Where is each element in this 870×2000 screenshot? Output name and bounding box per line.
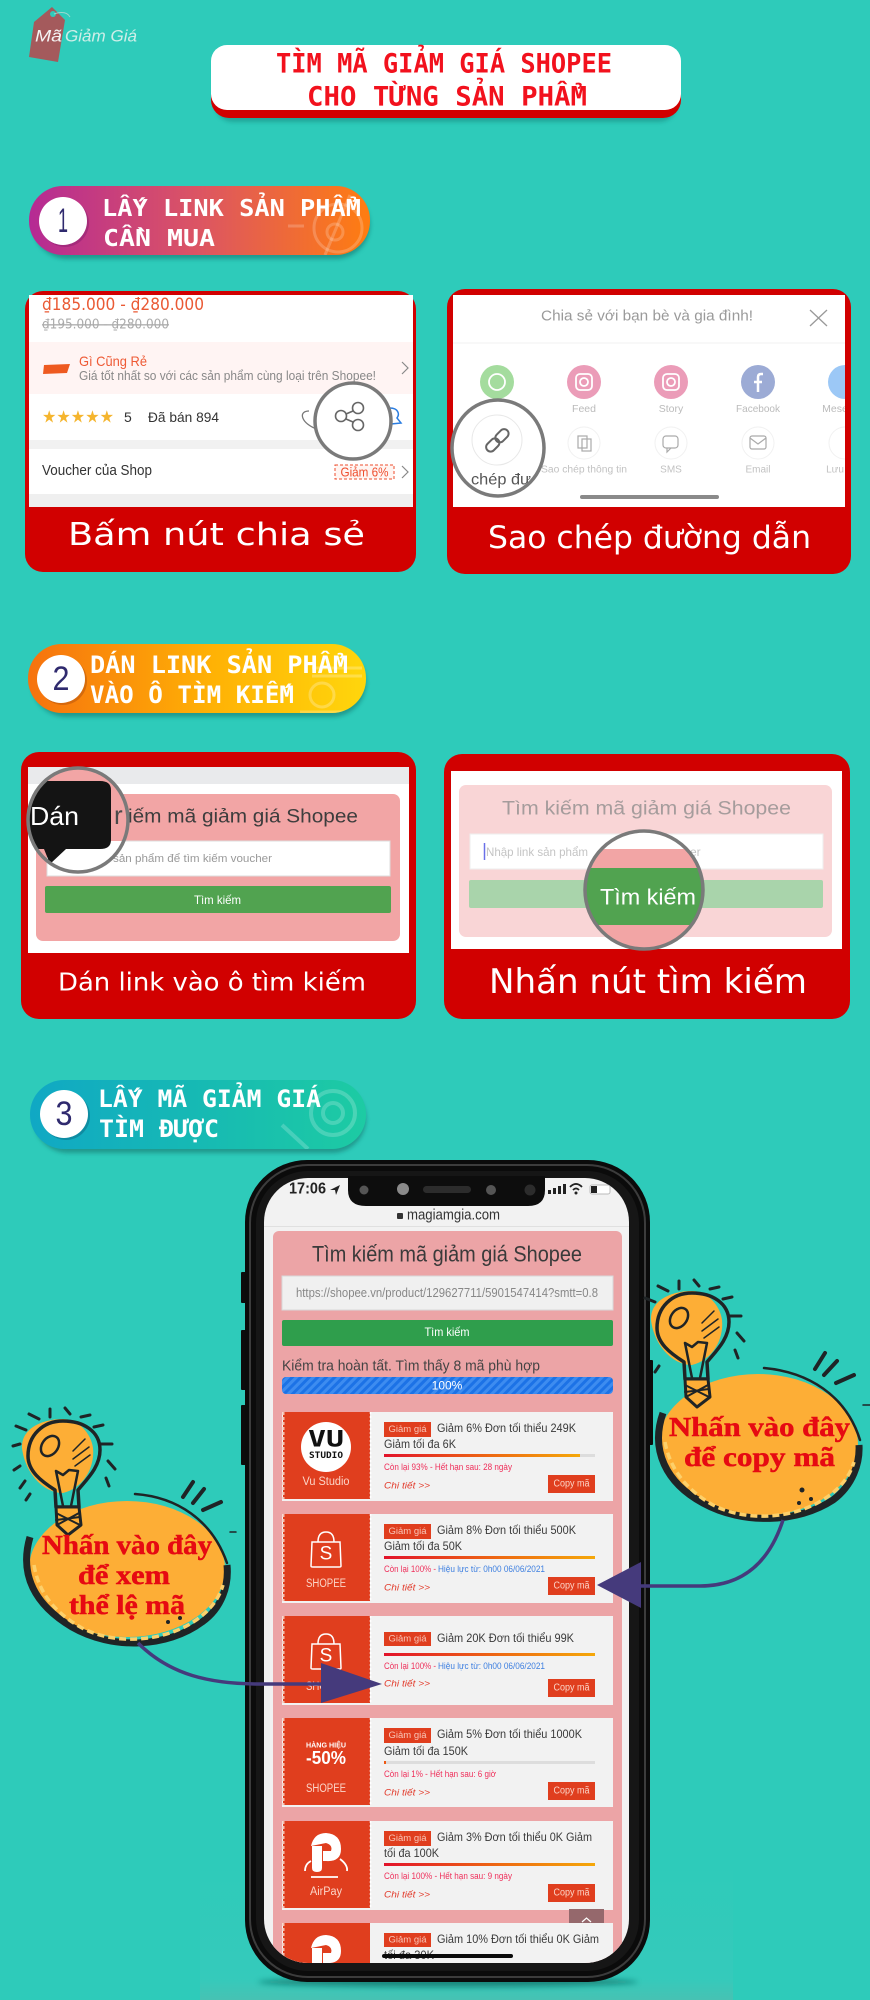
share sheet screenshot: SMS	[660, 464, 682, 476]
address bar: magiamgia.com	[407, 1206, 500, 1224]
voucher card: Shopee 5%: -50%	[306, 1748, 346, 1768]
step 3 badge: TÌM ĐƯỢC	[99, 1114, 219, 1143]
voucher card: Shopee 20K: Giảm 20K Đơn tối thiểu 99K	[437, 1631, 574, 1645]
panel: copy link	[447, 289, 862, 574]
voucher card: AirPay 3%: Copy mã	[554, 1888, 590, 1898]
voucher card: Shopee 20K	[282, 1616, 613, 1705]
step 2 badge: 2	[52, 660, 70, 698]
arrow: to Chi tiết link	[138, 1643, 382, 1703]
voucher card: Shopee 8%: Hiệu lực từ: 0h00 06/06/2021	[438, 1564, 545, 1574]
notch	[348, 1176, 545, 1206]
share sheet screenshot: Story	[659, 403, 684, 415]
voucher card: Vu Studio: Giảm tối đa 6K	[384, 1437, 456, 1451]
faded search form screenshot: er	[690, 845, 701, 859]
voucher card: Shopee 5%: HÀNG HIỆU	[306, 1740, 346, 1750]
voucher card: Shopee 5%: Giảm tối đa 150K	[384, 1744, 468, 1758]
voucher card: Shopee 5%: Chi tiết >>	[384, 1788, 430, 1798]
title banner: CHO TỪNG SẢN PHẨM	[307, 78, 587, 112]
voucher card: Shopee 5%: SHOPEE	[306, 1783, 346, 1795]
phone screen	[264, 1178, 629, 1991]
search form screenshot: Tìm kiếm	[194, 893, 241, 907]
search panel	[273, 1231, 622, 1991]
voucher card: Shopee 20K: Còn lại 100% -	[384, 1661, 436, 1671]
voucher card: Shopee 20K: Hiệu lực từ: 0h00 06/06/2021	[438, 1661, 545, 1671]
voucher card: Shopee 5%: Giảm giá	[388, 1730, 427, 1741]
voucher card: Shopee 8%	[282, 1514, 613, 1603]
caption: Dán link vào ô tìm kiếm	[58, 968, 366, 996]
product screenshot: Voucher của Shop	[42, 463, 152, 479]
address bar	[264, 1206, 629, 1227]
home indicator	[382, 1954, 513, 1958]
callout text: Nhấn vào đây	[669, 1412, 851, 1442]
voucher card: Vu Studio: Vu Studio	[302, 1476, 350, 1488]
voucher card: Shopee 8%: Giảm tối đa 50K	[384, 1539, 462, 1553]
voucher card: Shopee 8%: SHOPEE	[306, 1578, 346, 1590]
voucher card: AirPay 3%	[282, 1821, 613, 1910]
phone mockup	[241, 1160, 653, 1991]
voucher card: AirPay 10%: Giảm 10% Đơn tối thiểu 0K Giảm	[437, 1932, 599, 1946]
share sheet screenshot: Lưu	[826, 464, 844, 476]
voucher card: Shopee 8%: Copy mã	[554, 1580, 590, 1592]
product screenshot: Đã bán 894	[148, 409, 219, 425]
callout text	[669, 1412, 851, 1472]
product screenshot: ★★★★★	[42, 408, 114, 426]
voucher card: Vu Studio: Copy mã	[554, 1478, 590, 1490]
step 3 badge: LẤY MÃ GIẢM GIÁ	[98, 1082, 322, 1113]
product screenshot: ₫195.000 - ₫280.000	[42, 318, 169, 332]
coin shape	[658, 1353, 870, 1518]
voucher card: AirPay 3%: Chi tiết >>	[384, 1890, 430, 1900]
title banner: TÌM MÃ GIẢM GIÁ SHOPEE	[276, 45, 612, 80]
callout text: Nhấn vào đây	[42, 1530, 213, 1560]
voucher card: Shopee 20K: Chi tiết >>	[384, 1678, 430, 1690]
lightbulb icon	[645, 1280, 744, 1407]
search panel: Tìm kiếm	[424, 1325, 470, 1339]
step 2 badge: VÀO Ô TÌM KIẾM	[90, 679, 294, 709]
voucher card: Shopee 20K: Copy mã	[554, 1682, 590, 1694]
callout text: thể lệ mã	[69, 1590, 186, 1620]
voucher card: Vu Studio: STUDIO	[309, 1451, 344, 1461]
voucher card: Shopee 8%: Chi tiết >>	[384, 1582, 430, 1594]
voucher card: AirPay 3%: tối đa 100K	[384, 1846, 439, 1860]
voucher card: Shopee 8%: Giảm giá	[388, 1526, 427, 1537]
voucher card: AirPay 10%: Giảm giá	[388, 1934, 427, 1946]
product screenshot: ₫185.000 - ₫280.000	[42, 295, 204, 315]
voucher card: AirPay 3%: Giảm 3% Đơn tối thiểu 0K Giảm	[437, 1830, 592, 1844]
title banner	[211, 45, 681, 122]
voucher card: Shopee 8%: S	[320, 1544, 332, 1564]
arrow: to Copy mã button	[597, 1520, 783, 1608]
faded search form screenshot: Tìm kiếm mã giảm giá Shopee	[502, 798, 791, 820]
magnifier: copy link icon: chép đư	[471, 472, 531, 488]
coin shape	[27, 1482, 236, 1643]
step 3 badge: 3	[56, 1095, 72, 1133]
share sheet screenshot: Facebook	[736, 403, 781, 415]
voucher card: AirPay 10%	[282, 1923, 613, 1963]
voucher card: Vu Studio: Chi tiết >>	[384, 1480, 430, 1492]
magnifier: share icon	[315, 383, 391, 459]
voucher card: AirPay 3%: Giảm giá	[388, 1833, 427, 1844]
back to top button	[569, 1909, 604, 1923]
caption: Nhấn nút tìm kiếm	[489, 962, 807, 1002]
voucher card: Vu Studio: Giảm giá	[388, 1424, 427, 1435]
voucher card: Shopee 20K: S	[320, 1646, 332, 1666]
voucher card: Vu Studio: Còn lại 93% - Hết hạn sau: 28 ngày	[384, 1462, 512, 1472]
share sheet screenshot: Chia sẻ với bạn bè và gia đình!	[541, 308, 753, 324]
voucher card: AirPay 3%: AirPay	[310, 1886, 342, 1898]
logo: Mã Giảm Giá: Mã	[35, 26, 63, 46]
faded search form screenshot	[459, 785, 832, 937]
share sheet screenshot: Feed	[572, 403, 596, 415]
step 3 badge	[30, 1080, 366, 1153]
logo: Mã Giảm Giá: Giảm Giá	[65, 26, 137, 46]
magnifier: paste tooltip	[26, 766, 130, 874]
callout: copy voucher	[645, 1280, 870, 1518]
search form screenshot: sản phẩm để tìm kiếm voucher	[113, 853, 272, 865]
callout text: để copy mã	[684, 1442, 836, 1472]
panel: paste link	[20, 752, 416, 1019]
search form screenshot	[36, 794, 400, 941]
search form screenshot: iếm mã giảm giá Shopee	[128, 806, 358, 828]
product screenshot: Giảm 6%	[340, 464, 389, 480]
share sheet screenshot: Email	[745, 464, 771, 476]
voucher card: Shopee 8%: Còn lại 100% -	[384, 1564, 436, 1574]
status bar	[290, 1182, 610, 1195]
step 1 badge	[29, 186, 370, 259]
voucher card: Shopee 5%: Còn lại 1% - Hết hạn sau: 6 giờ	[384, 1769, 496, 1779]
magnifier: paste tooltip: r	[114, 800, 123, 830]
voucher card: Shopee 5%: Giảm 5% Đơn tối thiểu 1000K	[437, 1727, 582, 1741]
caption: Bấm nút chia sẻ	[68, 517, 365, 553]
voucher card: Shopee 20K: Giảm giá	[388, 1634, 427, 1644]
panel: share button	[25, 291, 416, 572]
step 2 badge: DÁN LINK SẢN PHẨM	[90, 648, 348, 679]
magnifier: search button: Tìm kiếm	[600, 884, 696, 910]
search panel: https://shopee.vn/product/129627711/5901547414?smtt=0.8	[296, 1286, 598, 1300]
step 2 badge	[28, 644, 370, 717]
status bar: 17:06	[289, 1180, 326, 1198]
magnifier: copy link icon	[451, 400, 545, 496]
product screenshot: Gì Cũng Rẻ	[79, 353, 147, 369]
voucher card: AirPay 10%: tối đa 30K	[384, 1948, 434, 1962]
product screenshot: Giá tốt nhất so với các sản phẩm cùng loại trên Shopee!	[79, 369, 376, 383]
step 1 badge: 1	[58, 202, 68, 240]
panel: press search	[444, 754, 850, 1019]
step 1 badge: LẤY LINK SẢN PHẨM	[102, 192, 361, 222]
magnifier: paste tooltip: Dán	[30, 801, 79, 831]
voucher card: Vu Studio: Giảm 6% Đơn tối thiểu 249K	[437, 1421, 576, 1435]
voucher card: AirPay 3%: Còn lại 100% - Hết hạn sau: 9 ngày	[384, 1871, 512, 1881]
search panel: Kiểm tra hoàn tất. Tìm thấy 8 mã phù hợp	[282, 1358, 540, 1374]
caption: Sao chép đường dẫn	[488, 520, 811, 556]
share sheet screenshot	[453, 308, 862, 499]
callout text	[42, 1530, 213, 1620]
share sheet screenshot: Mese	[822, 403, 848, 415]
voucher card: Shopee 8%: Giảm 8% Đơn tối thiểu 500K	[437, 1523, 576, 1537]
step 1 badge: CẦN MUA	[103, 224, 215, 252]
logo: Mã Giảm Giá	[29, 7, 137, 62]
voucher card: Vu Studio	[282, 1412, 613, 1501]
search panel: Tìm kiếm mã giảm giá Shopee	[312, 1242, 582, 1266]
product screenshot: 5	[124, 409, 132, 425]
callout text: để xem	[78, 1560, 171, 1590]
magnifier: search button	[585, 831, 703, 950]
callout: view voucher terms	[13, 1408, 236, 1643]
voucher card: Vu Studio: VU	[308, 1428, 344, 1452]
voucher card: Shopee 5%: Copy mã	[554, 1786, 590, 1796]
share sheet screenshot: Sao chép thông tin	[541, 464, 627, 476]
product screenshot	[29, 295, 413, 507]
voucher card: Shopee 5%	[282, 1718, 613, 1807]
lightbulb icon	[13, 1408, 115, 1535]
faded search form screenshot: Nhập link sản phẩm	[486, 845, 588, 859]
search panel: 100%	[432, 1378, 463, 1392]
voucher card: Shopee 20K: SHOPEE	[306, 1681, 346, 1693]
